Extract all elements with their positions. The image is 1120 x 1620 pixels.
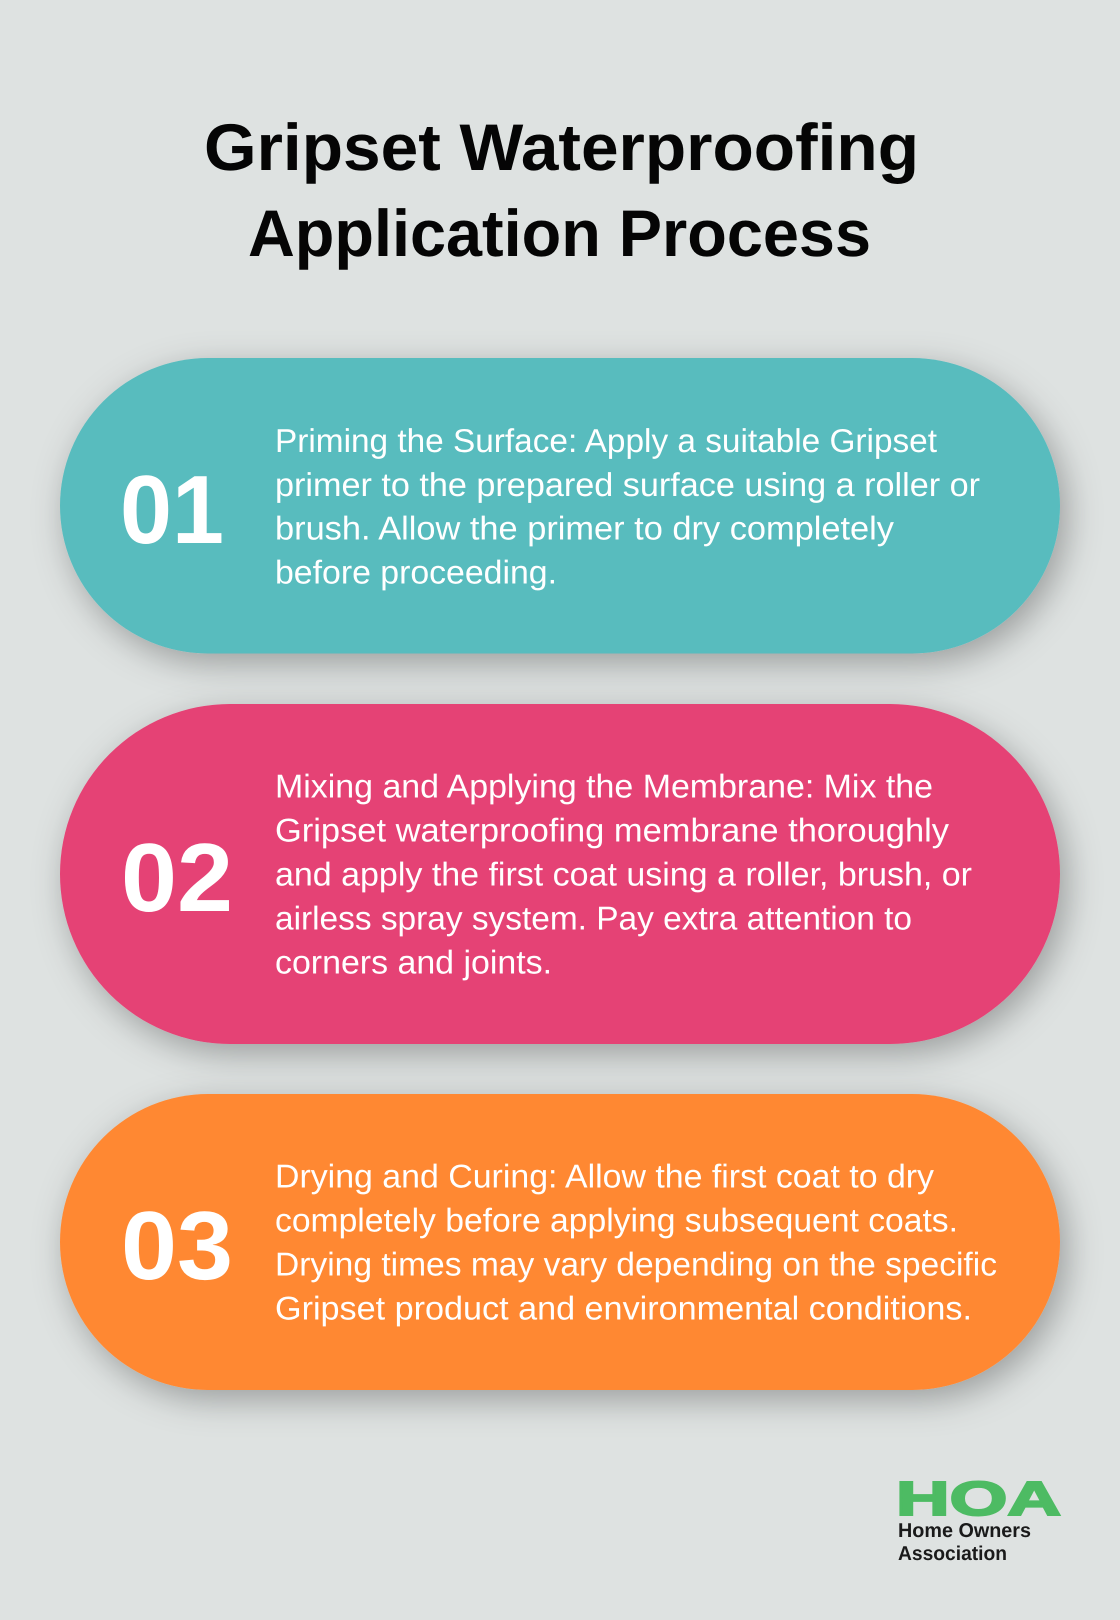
step 01 description: before proceeding.	[275, 554, 557, 590]
logo wordmark	[898, 1520, 1031, 1565]
pill background pink	[60, 704, 1060, 1044]
step 03 description: Drying and Curing: Allow the first coat to dry	[275, 1158, 935, 1194]
step 02 description: and apply the first coat using a roller, brush, or	[275, 856, 972, 892]
logo wordmark: Association	[898, 1543, 1007, 1565]
step number 03: 03	[121, 1191, 233, 1300]
step 03 description	[275, 1158, 997, 1326]
panel: step 01 priming	[60, 358, 1060, 654]
step 01 description	[275, 422, 980, 590]
step number 01: 01	[120, 455, 224, 564]
step 02 description: Gripset waterproofing membrane thoroughly	[275, 812, 950, 848]
step 02 description: airless spray system. Pay extra attention to	[275, 900, 912, 936]
title	[204, 110, 919, 270]
step 02 description: corners and joints.	[275, 944, 552, 980]
step 02 description: Mixing and Applying the Membrane: Mix the	[275, 768, 933, 804]
step 01 description: primer to the prepared surface using a roller or	[275, 466, 980, 503]
logo wordmark: Home Owners	[898, 1520, 1031, 1542]
pill background orange	[60, 1094, 1060, 1390]
panel: step 02 membrane	[60, 704, 1060, 1044]
step 03 description: completely before applying subsequent coats.	[275, 1202, 958, 1238]
step 03 description: Drying times may vary depending on the specific	[275, 1246, 997, 1282]
title: Application Process	[248, 196, 871, 270]
panel: step 03 curing	[60, 1094, 1060, 1390]
title: Gripset Waterproofing	[204, 110, 919, 184]
logo: Home Owners Association	[896, 1473, 1061, 1565]
step number 02: 02	[121, 823, 233, 932]
logo mark HOA: HOA	[896, 1473, 1061, 1526]
step 03 description: Gripset product and environmental conditions.	[275, 1290, 972, 1326]
pill background teal	[60, 358, 1060, 654]
step 01 description: brush. Allow the primer to dry completely	[275, 510, 895, 546]
step 01 description: Priming the Surface: Apply a suitable Gripset	[275, 422, 937, 459]
step 02 description	[275, 768, 972, 980]
